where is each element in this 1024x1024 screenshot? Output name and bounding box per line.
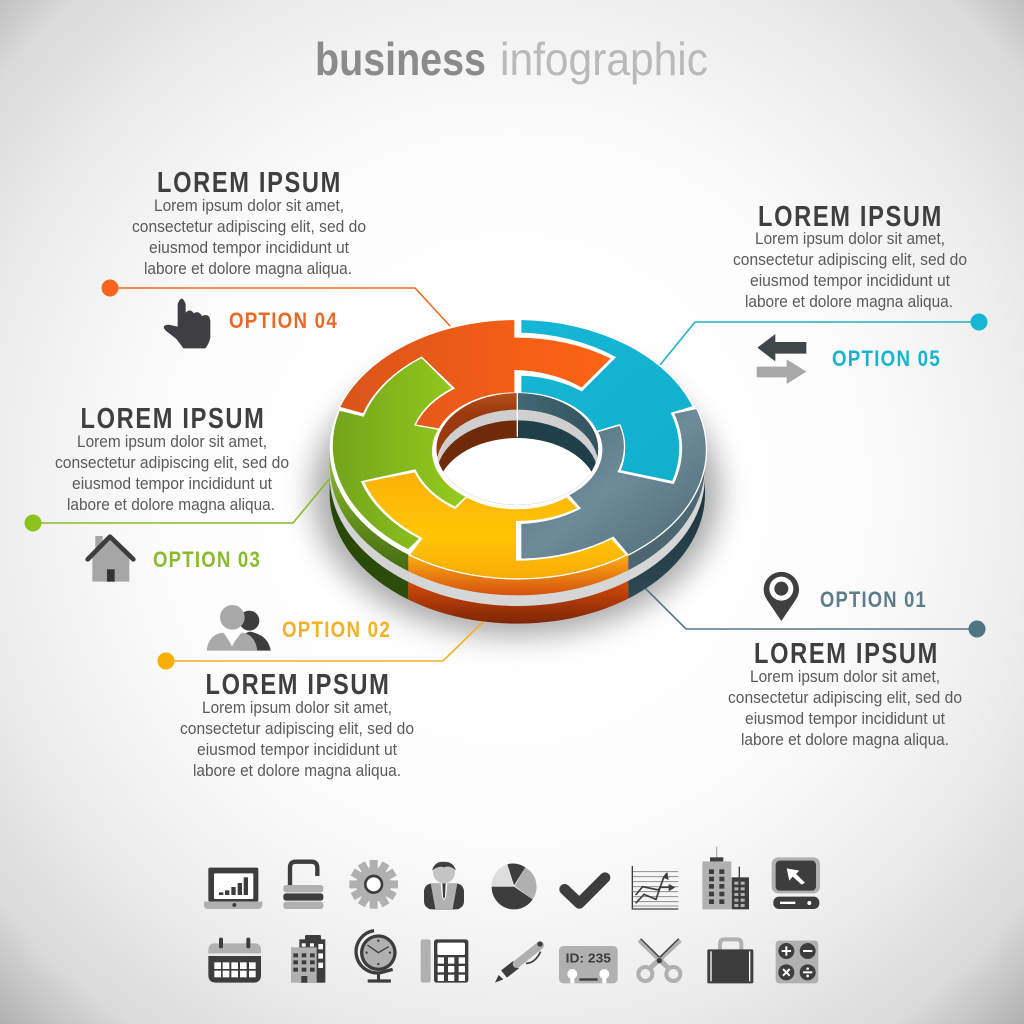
text block: option 05: consectetur adipiscing elit, sed do	[733, 251, 967, 269]
segment: slate, option 01	[521, 408, 706, 559]
text block: option 05	[733, 201, 967, 311]
leader line: option 04	[102, 280, 450, 326]
leader line: option 01	[643, 586, 986, 638]
text block: option 03: labore et dolore magna aliqua.	[67, 496, 275, 514]
text block: option 02: labore et dolore magna aliqua.	[193, 762, 401, 780]
outer wall: green segment	[330, 451, 408, 600]
icon: open padlock	[283, 862, 323, 909]
text block: option 02	[180, 669, 414, 780]
segment: orange, option 04	[339, 319, 612, 429]
outer wall: yellow segment	[408, 554, 628, 624]
icon: ID badge	[559, 946, 618, 983]
text block: option 01: eiusmod tempor incididunt ut	[745, 710, 945, 728]
text block: option 03	[55, 403, 289, 514]
label: option 01: OPTION 01	[820, 587, 927, 612]
text block: option 01	[728, 638, 962, 749]
text block: option 02: eiusmod tempor incididunt ut	[197, 741, 397, 759]
icon: skyscrapers	[702, 847, 749, 909]
text block: option 01: labore et dolore magna aliqua.	[741, 731, 949, 749]
label: option 02: OPTION 02	[282, 617, 391, 642]
icon: laptop chart	[204, 868, 262, 909]
icon: pen	[495, 941, 543, 983]
donut shadow	[312, 347, 720, 637]
title: infographic	[500, 33, 708, 85]
icon: briefcase	[707, 939, 753, 983]
text block: option 04: Lorem ipsum dolor sit amet,	[154, 197, 344, 215]
donut hole with inner walls	[436, 393, 598, 505]
icon: pie chart	[492, 864, 537, 909]
text block: option 03: consectetur adipiscing elit, sed do	[55, 454, 289, 472]
icon: scissors	[638, 939, 680, 981]
text block: option 04: labore et dolore magna aliqua.	[144, 260, 352, 278]
text block: option 05: LOREM IPSUM	[758, 201, 943, 233]
title: business	[315, 33, 486, 85]
icon: gear	[349, 860, 398, 909]
icon: pointing hand	[164, 299, 210, 348]
label: option 03: OPTION 03	[153, 547, 261, 572]
text block: option 05: Lorem ipsum dolor sit amet,	[755, 230, 945, 248]
label: option 05: OPTION 05	[832, 346, 941, 371]
icon: check mark	[565, 878, 605, 903]
text block: option 01: Lorem ipsum dolor sit amet,	[750, 668, 940, 686]
icon: ID badge: ID: 235	[566, 952, 611, 966]
text block: option 02: LOREM IPSUM	[206, 669, 390, 701]
text block: option 03: Lorem ipsum dolor sit amet,	[77, 433, 267, 451]
label: option 04: OPTION 04	[229, 308, 338, 333]
icon row 1 right	[492, 847, 820, 983]
text block: option 01: consectetur adipiscing elit, sed do	[728, 689, 962, 707]
icon: exchange arrows	[757, 334, 806, 384]
text block: option 01: LOREM IPSUM	[754, 638, 939, 670]
text block: option 04: LOREM IPSUM	[157, 167, 342, 199]
text block: option 04	[132, 167, 366, 278]
leader line: option 03	[24, 477, 331, 532]
icon: globe clock	[356, 931, 397, 983]
icon: businessman	[424, 861, 464, 909]
text block: option 05: eiusmod tempor incididunt ut	[750, 272, 950, 290]
leader line: option 02	[158, 618, 487, 670]
icon row 1 left	[204, 860, 468, 983]
icon: office buildings	[291, 935, 325, 983]
leader line: option 05	[660, 314, 988, 365]
text block: option 03: eiusmod tempor incididunt ut	[72, 475, 272, 493]
icon: calendar	[208, 938, 261, 983]
text block: option 02: Lorem ipsum dolor sit amet,	[202, 699, 392, 717]
icon: location pin	[764, 572, 799, 621]
title	[315, 33, 708, 85]
icon: calculator and phone	[421, 939, 468, 983]
text block: option 04: consectetur adipiscing elit, sed do	[132, 218, 366, 236]
top face base	[330, 319, 705, 579]
icon: line chart	[632, 866, 678, 909]
icon: computer cursor	[772, 857, 820, 909]
icon: house	[88, 536, 133, 582]
text block: option 02: consectetur adipiscing elit, sed do	[180, 720, 414, 738]
text block: option 05: labore et dolore magna aliqua.	[745, 293, 953, 311]
icon: math symbols	[776, 941, 818, 983]
segment: yellow, option 02	[363, 472, 627, 579]
text block: option 03: LOREM IPSUM	[80, 403, 266, 435]
segment: green, option 03	[332, 357, 467, 550]
segment: cyan, option 05	[521, 319, 693, 482]
outer wall: slate segment	[628, 470, 705, 599]
icon: people	[207, 605, 271, 651]
text block: option 04: eiusmod tempor incididunt ut	[149, 239, 349, 257]
3D donut chart	[330, 319, 706, 624]
